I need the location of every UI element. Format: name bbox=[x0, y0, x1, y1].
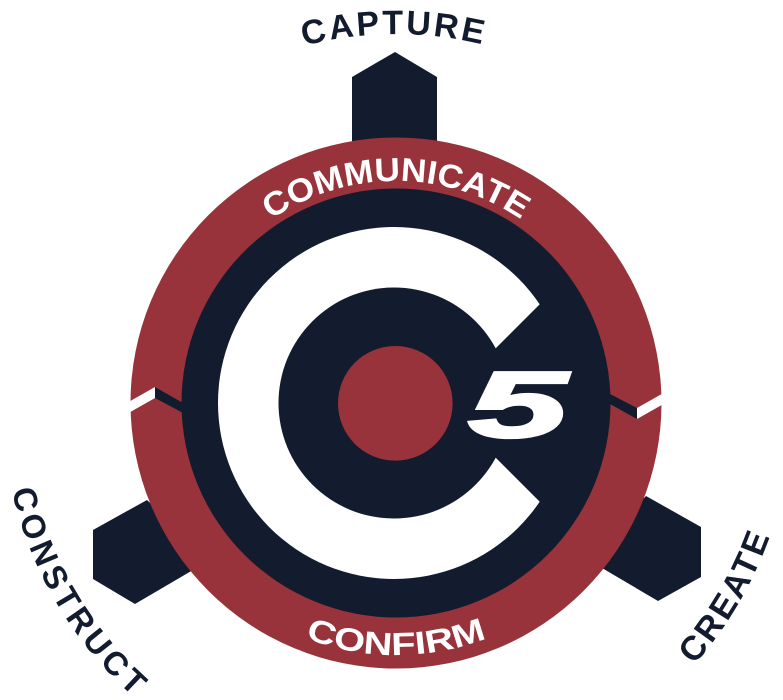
notch: left bbox=[125, 387, 183, 415]
white letter C bbox=[218, 227, 605, 579]
hexagon tab: create bbox=[585, 496, 701, 601]
label: CONFIRM: CONFIRM bbox=[309, 618, 484, 656]
navy disc bbox=[182, 188, 610, 618]
outer red ring bbox=[130, 138, 662, 668]
hexagon tab: capture bbox=[352, 52, 437, 170]
numeral 5: 5 bbox=[468, 353, 571, 457]
label: CREATE: CREATE bbox=[681, 530, 770, 660]
red centre circle bbox=[338, 346, 453, 461]
hexagon tab: construct bbox=[93, 500, 210, 604]
label: CAPTURE: CAPTURE bbox=[302, 10, 485, 44]
label: CONSTRUCT: CONSTRUCT bbox=[14, 488, 148, 692]
label: COMMUNICATE: COMMUNICATE bbox=[264, 158, 532, 219]
notch: right bbox=[610, 391, 667, 419]
